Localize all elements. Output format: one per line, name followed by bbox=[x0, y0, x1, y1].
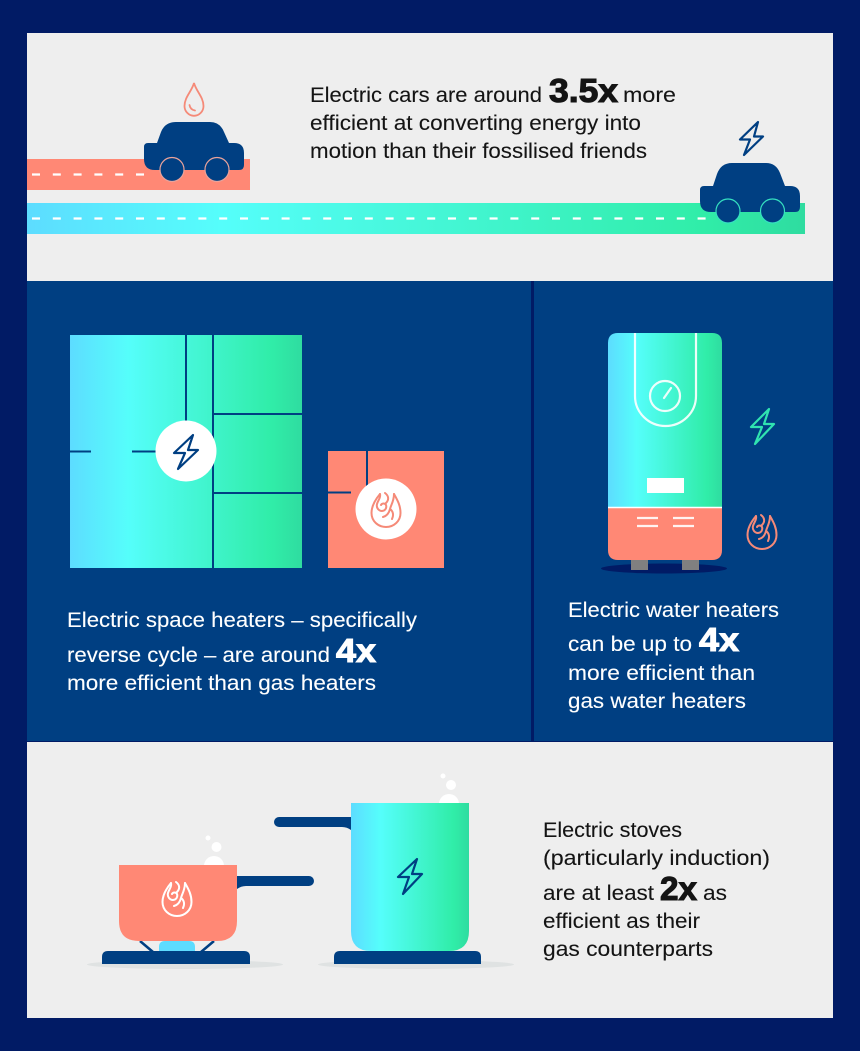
text: cars efficiency: Electric cars are around bbox=[310, 83, 542, 107]
illustration: electric house floor plan bbox=[70, 335, 302, 568]
gas flame bbox=[159, 941, 195, 951]
text: cars efficiency: more bbox=[623, 83, 676, 107]
panel: electric cars bbox=[27, 33, 833, 281]
text: space heaters efficiency: Electric space heaters – specifically bbox=[67, 608, 417, 632]
text: water heaters efficiency: Electric water heaters bbox=[568, 598, 779, 622]
road: electric car bbox=[27, 203, 805, 234]
text: cars efficiency: efficient at converting energy into bbox=[310, 111, 641, 135]
illustration: gas stove and pan bbox=[87, 836, 314, 969]
illustration: gas house floor plan bbox=[328, 451, 444, 568]
text: water heaters efficiency: gas water heaters bbox=[568, 689, 746, 713]
text: space heaters efficiency: more efficient than gas heaters bbox=[67, 671, 376, 695]
text: stoves efficiency: efficient as their bbox=[543, 909, 700, 933]
icon: flame bbox=[748, 515, 776, 549]
icon: lightning bolt bbox=[174, 435, 198, 469]
text: stoves efficiency: as bbox=[703, 881, 727, 905]
illustration: induction stove and pot bbox=[274, 774, 514, 969]
panel: space heaters bbox=[27, 281, 531, 741]
text: water heaters efficiency: can be up to bbox=[568, 632, 692, 656]
icon: flame bbox=[372, 493, 400, 527]
text: space heaters efficiency bbox=[67, 608, 417, 695]
text: stoves efficiency: are at least bbox=[543, 881, 654, 905]
icon: electric car bbox=[700, 163, 800, 223]
steam bubbles bbox=[439, 774, 459, 814]
icon: flame bbox=[162, 882, 192, 916]
text: water heaters efficiency: 4x bbox=[699, 621, 740, 658]
text: stoves efficiency: 2x bbox=[660, 870, 698, 907]
text: water heaters efficiency bbox=[568, 598, 779, 713]
text: cars efficiency: motion than their fossilised friends bbox=[310, 139, 647, 163]
icon: fuel drop bbox=[184, 83, 204, 116]
text: space heaters efficiency: 4x bbox=[336, 632, 377, 669]
heater dial bbox=[650, 381, 680, 411]
text: stoves efficiency: (particularly induction) bbox=[543, 846, 770, 870]
icon: petrol car bbox=[144, 122, 244, 182]
icon: lightning bolt above car bbox=[740, 122, 763, 155]
icon: lightning bolt bbox=[398, 859, 422, 894]
icon: lightning bolt bbox=[751, 409, 774, 444]
road: fossil fuel car bbox=[27, 159, 250, 190]
illustration: water heater bbox=[601, 333, 727, 574]
text: cars efficiency: 3.5x bbox=[549, 72, 619, 109]
text: cars efficiency bbox=[310, 72, 676, 163]
text: space heaters efficiency: reverse cycle – are around bbox=[67, 643, 330, 667]
text: water heaters efficiency: more efficient than bbox=[568, 661, 755, 685]
text: stoves efficiency bbox=[543, 818, 770, 961]
panel: water heaters bbox=[534, 281, 833, 741]
text: stoves efficiency: gas counterparts bbox=[543, 937, 713, 961]
panel: stoves bbox=[27, 742, 833, 1018]
steam bubbles bbox=[204, 836, 224, 876]
text: stoves efficiency: Electric stoves bbox=[543, 818, 682, 842]
